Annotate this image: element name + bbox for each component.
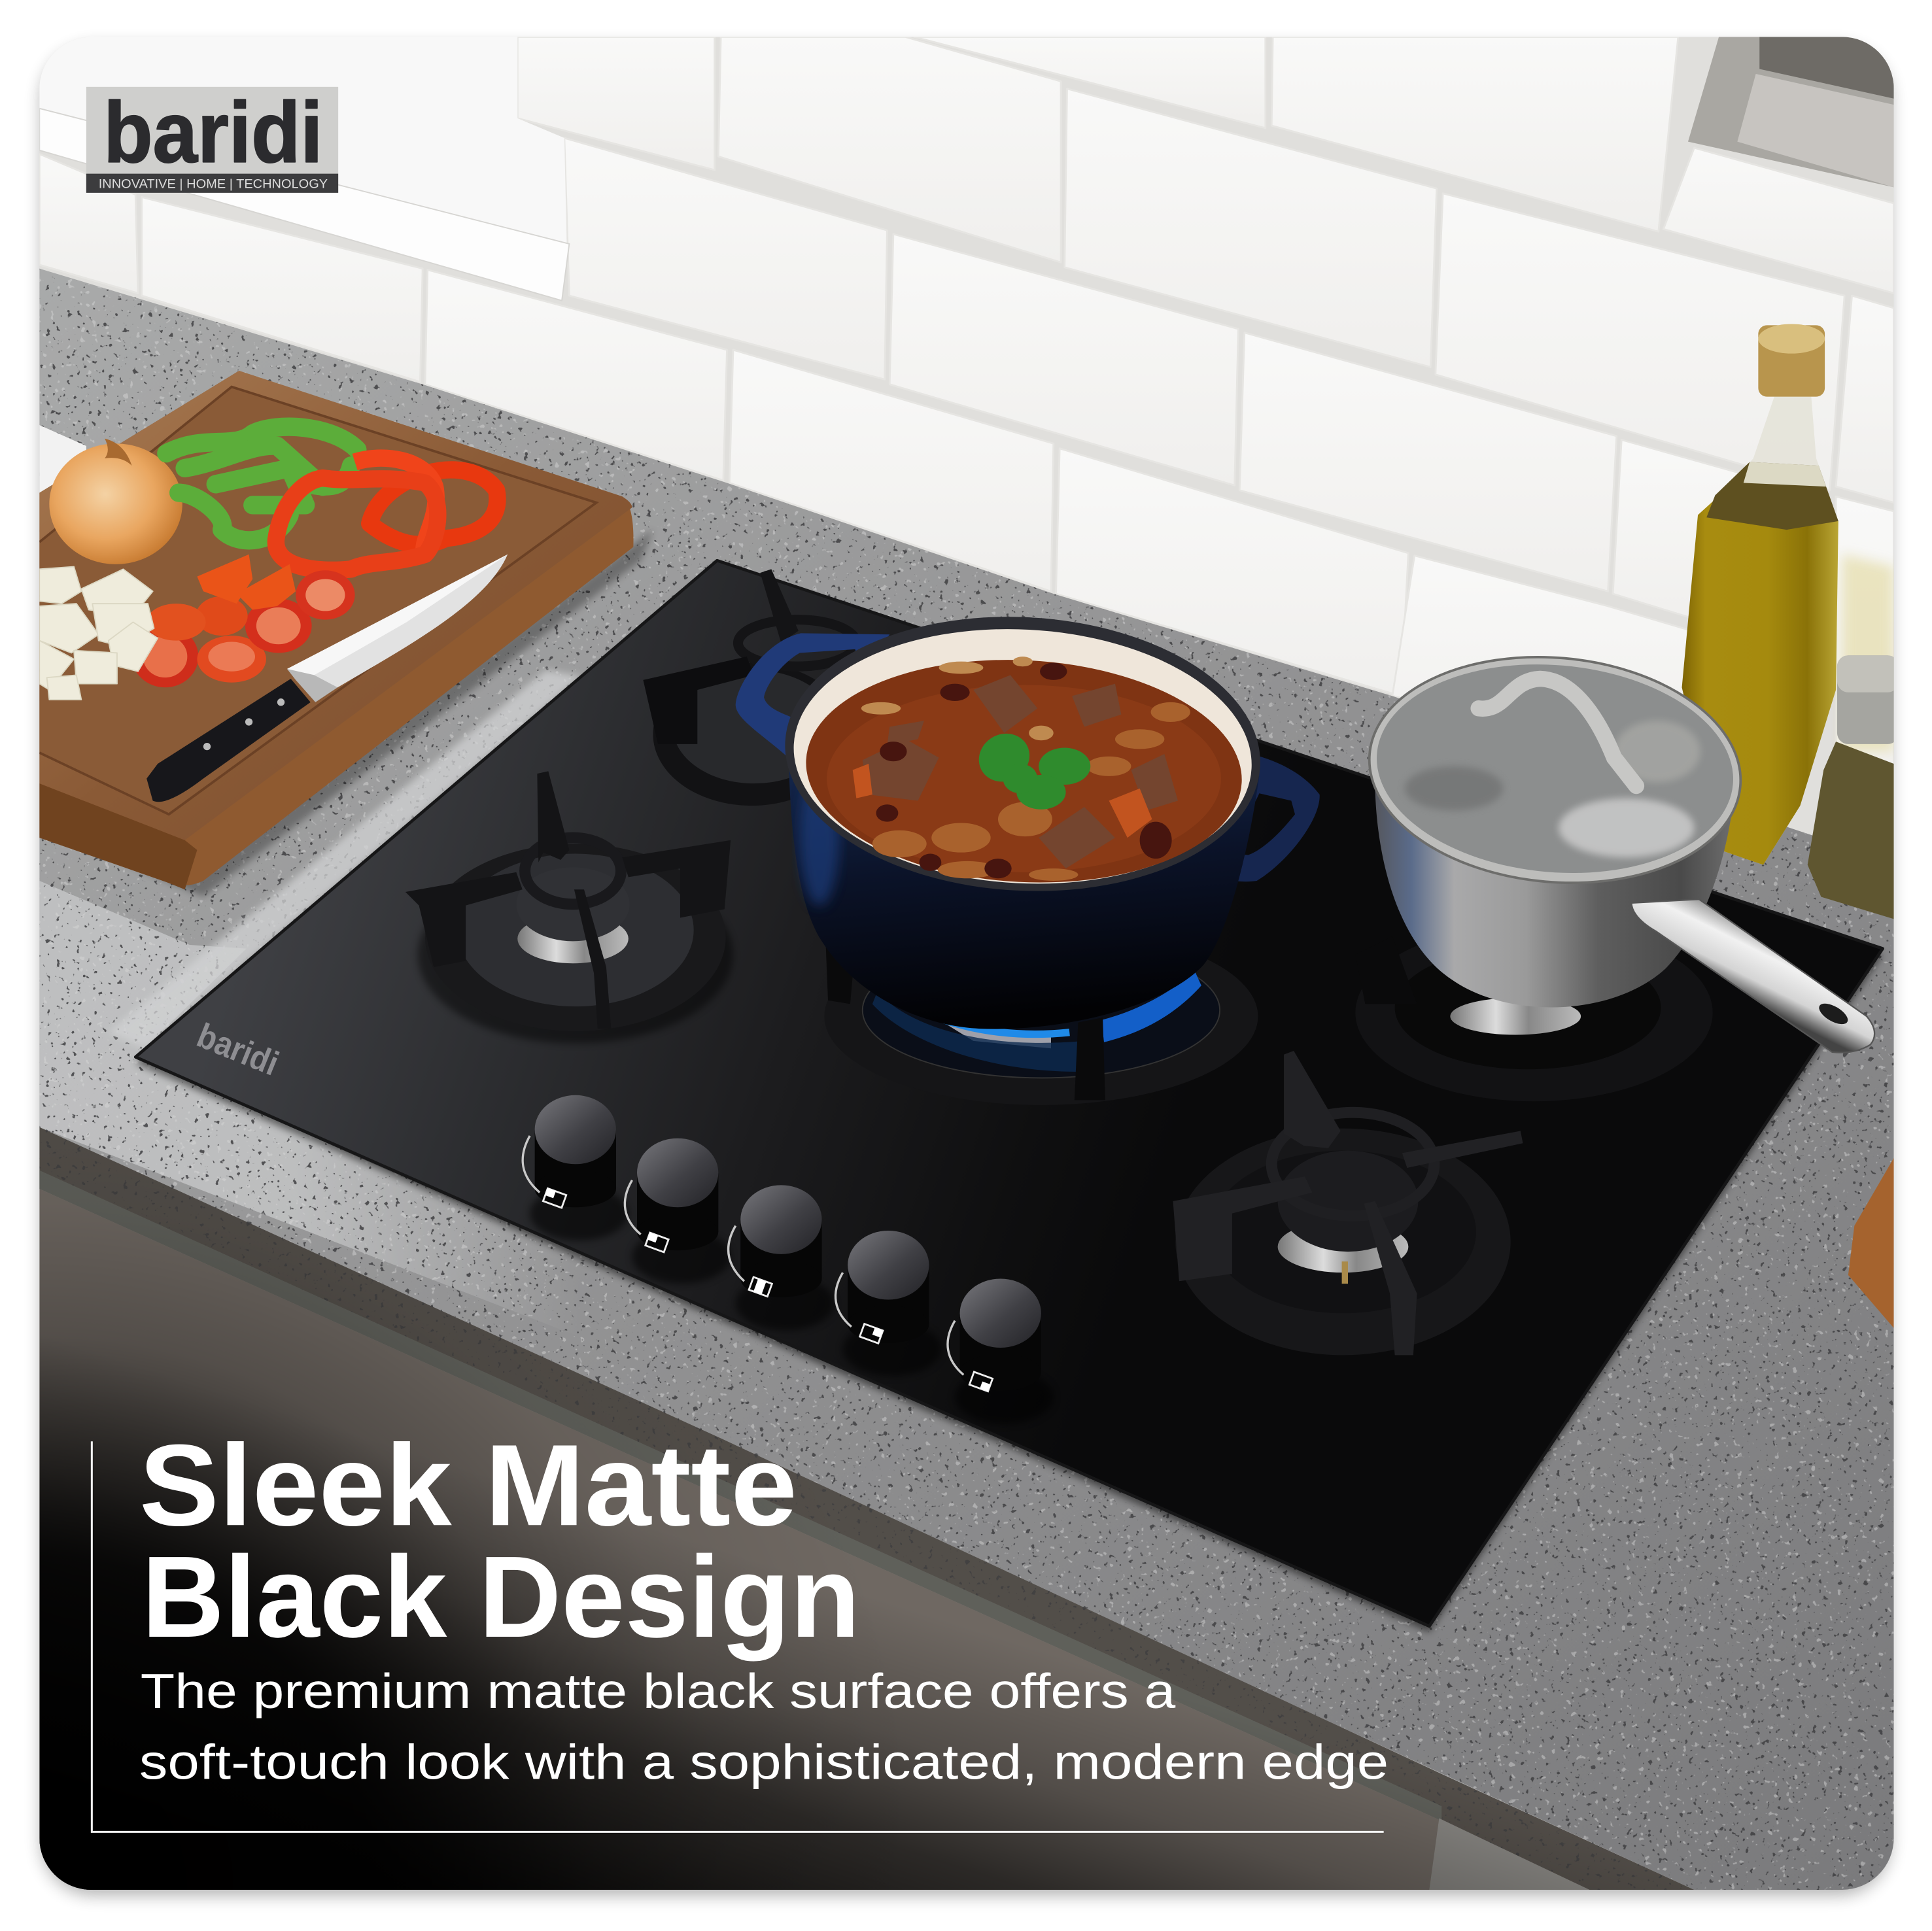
glass reflection strip [109, 670, 581, 1048]
knob shadows [530, 1186, 1054, 1424]
tomatoes [132, 555, 355, 687]
window sill [39, 109, 569, 301]
onion [49, 439, 182, 564]
burner: back left [643, 569, 856, 806]
pot highlight [800, 770, 839, 906]
pot right handle [1171, 754, 1320, 881]
brand mark on glass: baridi [192, 1016, 284, 1084]
front right supports [1173, 1051, 1523, 1355]
chili stew [801, 649, 1247, 893]
saucepan [1360, 642, 1874, 1053]
description: The premium matte black surface offers a [141, 1664, 1175, 1718]
logo: baridi [103, 84, 323, 180]
igniter [1342, 1261, 1348, 1284]
knife [147, 555, 508, 802]
knob 2 [625, 1138, 718, 1252]
text frame [92, 1441, 1384, 1832]
cilantro garnish [970, 725, 1090, 810]
pot left handle [736, 633, 889, 764]
lid handle [1479, 679, 1636, 786]
knob 1 [523, 1095, 616, 1208]
burner: front left [405, 771, 733, 1044]
bottle cap [1758, 324, 1825, 397]
oil bottle [1682, 324, 1838, 865]
onion cubes [39, 567, 158, 700]
upper cabinet frame [1688, 37, 1894, 187]
description [139, 1664, 1389, 1789]
description: soft-touch look with a sophisticated, modern edge [139, 1734, 1389, 1789]
wooden board right [1848, 1158, 1894, 1328]
heading: Black Design [142, 1532, 860, 1662]
dark text gradient [39, 1109, 1715, 1897]
reflection behind onion [39, 425, 86, 499]
burner: back right [1355, 924, 1713, 1101]
front edge speckle [39, 1109, 1715, 1897]
red peppers [276, 458, 498, 570]
cutting board [39, 371, 634, 889]
spice jar [1808, 655, 1899, 919]
handle hole [1816, 999, 1851, 1029]
heading: Sleek Matte [139, 1420, 797, 1550]
counter lip [39, 1171, 1441, 1820]
counter front edge [39, 1127, 1694, 1890]
knob 5 [948, 1279, 1041, 1392]
wall [40, 37, 1894, 836]
knob 3 [729, 1185, 822, 1297]
logo: INNOVATIVE | HOME | TECHNOLOGY [99, 177, 328, 191]
window recess [39, 37, 567, 247]
cast iron pot [736, 605, 1320, 1029]
burner: front right [1173, 1051, 1523, 1355]
hob glass [135, 560, 1883, 1632]
subway tiles [41, 38, 1893, 764]
knob 4 [836, 1231, 929, 1343]
base cabinet [39, 1189, 1589, 1890]
pot body [789, 758, 1259, 1029]
oil glow on tile [1842, 555, 1894, 751]
front left supports [405, 771, 731, 1029]
burner: centre with blue flame [824, 928, 1258, 1105]
pan handle [1631, 899, 1874, 1053]
heading [139, 1420, 860, 1662]
control knobs [523, 1095, 1041, 1392]
green peppers [166, 427, 357, 540]
pan lid [1368, 650, 1742, 887]
counter front reflection [39, 881, 525, 1314]
cutting board shadow [123, 530, 653, 897]
